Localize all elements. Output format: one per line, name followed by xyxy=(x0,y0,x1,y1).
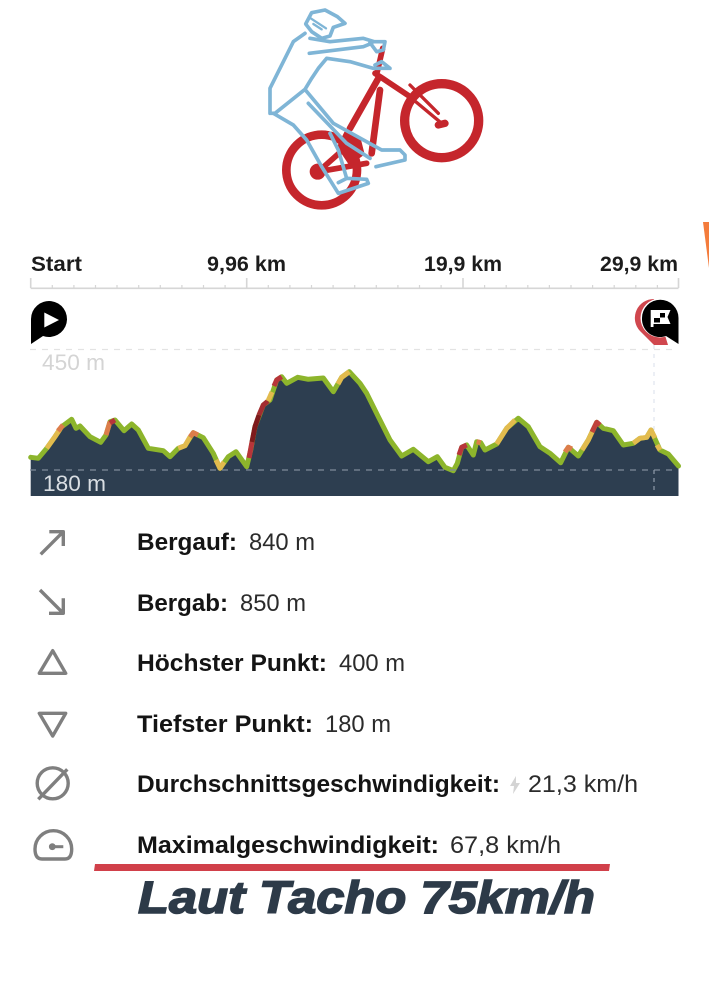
bike: wheels and frame xyxy=(286,48,479,205)
callout: Laut Tacho 75km/h: Laut Tacho 75km/h xyxy=(138,872,595,923)
top reference line xyxy=(30,348,678,350)
label: 450 m: 450 m xyxy=(42,350,105,375)
red underline bar xyxy=(94,864,610,871)
statistic: Tiefster Punkt: 180 m xyxy=(325,711,391,738)
statistic: Bergauf xyxy=(41,529,315,556)
icon: arrow up right xyxy=(41,532,63,554)
bottom reference line xyxy=(30,469,678,471)
icon: triangle up xyxy=(39,651,66,673)
axis label: 19,9 km: 19,9 km xyxy=(424,253,502,276)
icon: lightning bolt xyxy=(510,776,520,794)
elevation chart xyxy=(30,345,678,496)
statistic: Bergab: 850 m xyxy=(240,590,306,617)
statistic: Durchschnittsgeschwindigkeit: Durchschnittsgeschwindigkeit: xyxy=(137,771,500,798)
elevation area xyxy=(31,372,678,496)
statistic: Maximalgeschwindigkeit: 67,8 km/h xyxy=(450,832,561,859)
icon: triangle down xyxy=(39,713,66,736)
statistic: Bergauf: 840 m xyxy=(249,529,315,556)
axis line and ticks xyxy=(31,278,678,288)
statistic: Tiefster Punkt: Tiefster Punkt: xyxy=(137,711,313,738)
statistic: Höchster Punkt xyxy=(39,650,405,677)
elevation line: green xyxy=(31,372,678,471)
statistic: Bergab: Bergab: xyxy=(137,590,228,617)
label: 180 m: 180 m xyxy=(43,471,106,496)
statistic: Höchster Punkt: Höchster Punkt: xyxy=(137,650,327,677)
statistic: Durchschnittsgeschwindigkeit: 21,3 km/h xyxy=(528,771,638,798)
elevation line: steep sections xyxy=(47,372,660,468)
finish marker line over area xyxy=(653,470,655,493)
rider outline xyxy=(270,10,405,193)
statistic: Bergab xyxy=(40,590,306,617)
axis label: 9,96 km: 9,96 km xyxy=(207,253,286,276)
axis label: 29,9 km: 29,9 km xyxy=(600,253,678,276)
decorative orange wedge at right edge xyxy=(703,222,709,268)
illustration: rider on bike doing a wheelie xyxy=(270,10,479,205)
statistic: Tiefster Punkt xyxy=(39,711,391,738)
statistic: Durchschnittsgeschwindigkeit xyxy=(37,768,638,799)
icon: arrow down right xyxy=(40,590,63,613)
statistic: Maximalgeschwindigkeit: Maximalgeschwindigkeit: xyxy=(137,832,439,859)
statistic: Bergauf: Bergauf: xyxy=(137,529,237,556)
statistic: Maximalgeschwindigkeit xyxy=(35,831,561,859)
icon: average symbol xyxy=(37,768,68,799)
statistic: Höchster Punkt: 400 m xyxy=(339,650,405,677)
axis label: Start: Start xyxy=(31,253,82,276)
icon: finish pin xyxy=(635,298,680,345)
finish marker line xyxy=(653,345,655,470)
distance axis xyxy=(31,253,678,288)
icon: start pin xyxy=(31,301,67,344)
icon: speedometer xyxy=(35,831,72,859)
